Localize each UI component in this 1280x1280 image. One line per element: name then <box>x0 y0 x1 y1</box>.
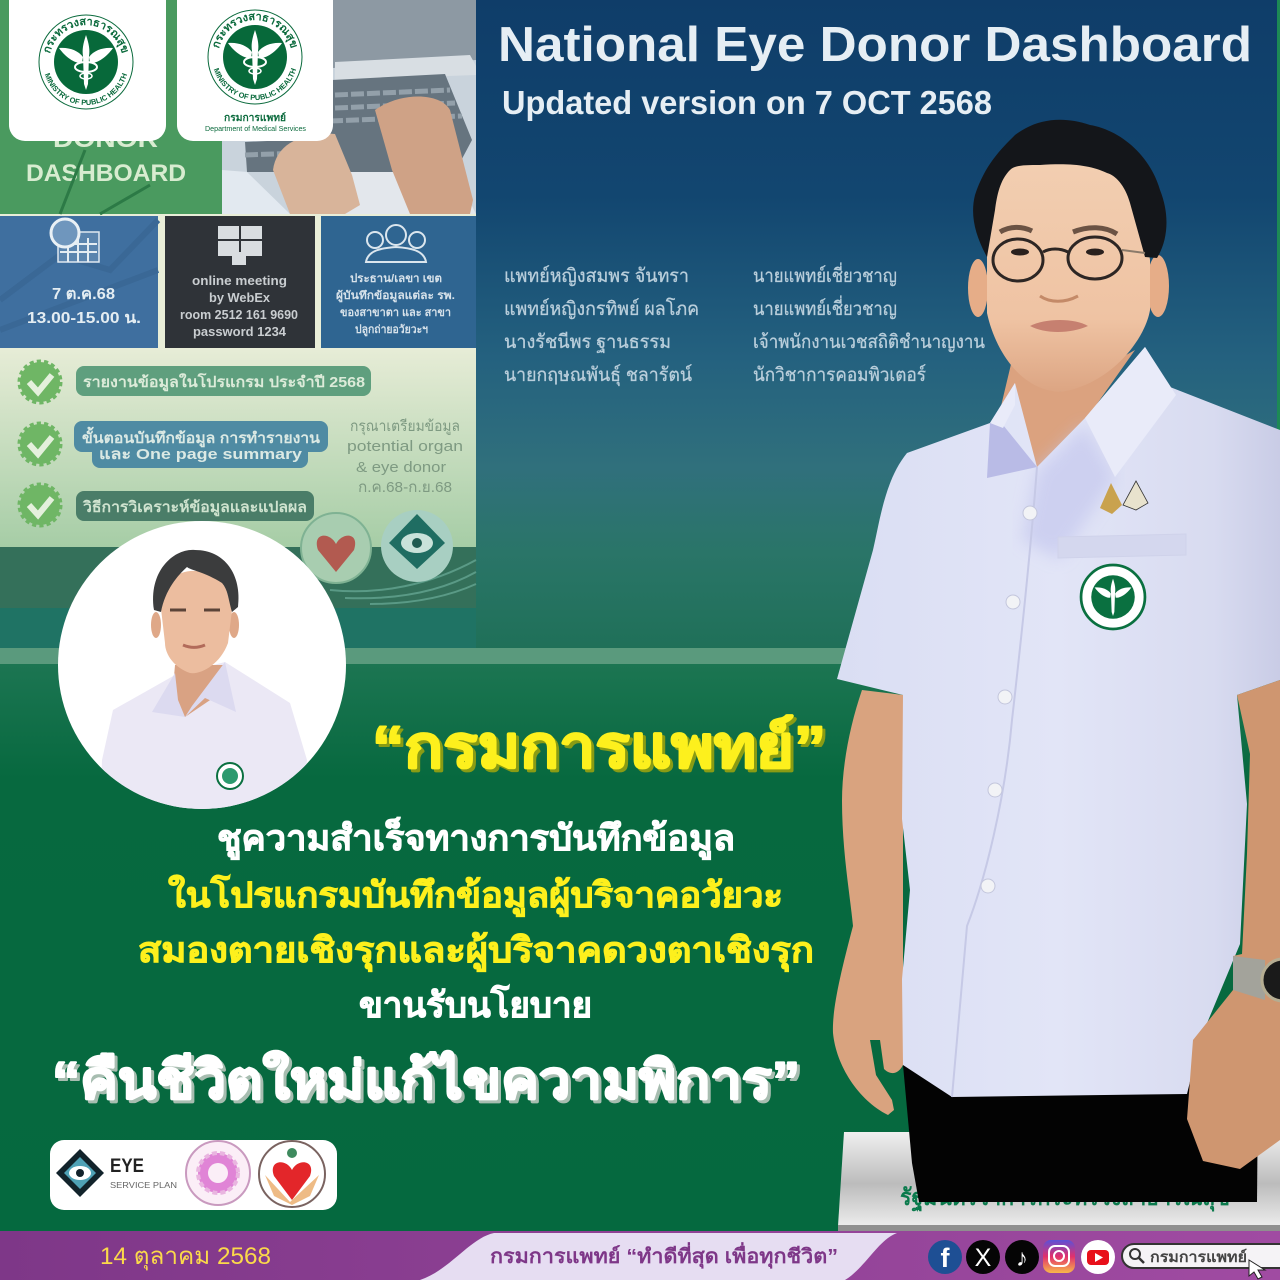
poster header green panel: DONOR <box>53 126 158 153</box>
headline body: ขานรับนโยบาย <box>359 984 592 1025</box>
poster footer band <box>0 547 476 608</box>
poster info: date: 13.00-15.00 น. <box>27 310 141 327</box>
poster info: participants: ประธาน/เลขา เขต <box>350 272 442 285</box>
icon: youtube <box>1081 1240 1115 1274</box>
participant names: นักวิชาการคอมพิวเตอร์ <box>753 364 926 386</box>
face <box>987 149 1150 392</box>
poster info: participants: ปลูกถ่ายอวัยวะฯ <box>355 323 428 337</box>
portrait: main official <box>833 120 1280 1202</box>
headline body: สมองตายเชิงรุกและผู้บริจาคดวงตาเชิงรุก <box>138 931 814 972</box>
logo card: Department of Medical Services: Department of Medical Services <box>205 126 306 133</box>
poster pill 1 <box>76 366 371 396</box>
icon: tiktok: ♪ <box>1016 1245 1028 1272</box>
left arm and hand <box>833 690 903 1115</box>
icon: X: X <box>975 1244 992 1272</box>
icon: facebook <box>928 1240 962 1274</box>
participant names <box>504 262 985 387</box>
shirt body <box>837 347 1280 1097</box>
poster badges <box>301 510 453 583</box>
neck <box>997 350 1135 470</box>
poster info: participants: ผู้บันทึกข้อมูลแต่ละ รพ. <box>336 289 455 303</box>
search box <box>1122 1244 1280 1279</box>
mouth <box>1030 320 1088 332</box>
heading: department: “กรมการแพทย์” <box>375 717 829 783</box>
participant names: นายกฤษณพันธุ์ ชลารัตน์ <box>504 364 692 387</box>
headline body: ชูความสำเร็จทางการบันทึกข้อมูล <box>217 816 735 860</box>
poster pill 2: ขั้นตอนบันทึกข้อมูล การทำรายงาน <box>82 426 321 448</box>
pocket <box>1058 534 1186 558</box>
logo: organ donation <box>259 1141 325 1207</box>
poster info: online meeting: online meeting <box>192 273 287 288</box>
footer date: 14 ตุลาคม 2568 <box>100 1243 271 1271</box>
buttons <box>981 506 1037 893</box>
footer bar <box>0 1231 1280 1280</box>
nose <box>1040 296 1078 301</box>
faded poster <box>0 0 476 608</box>
poster info: participants: ของสาขาตา และ สาขา <box>340 307 451 319</box>
hair <box>973 120 1166 258</box>
heading: department: “กรมการแพทย์” <box>372 714 826 780</box>
participant names: แพทย์หญิงกรทิพย์ ผลโภค <box>504 297 699 320</box>
poster pill 3: วิธีการวิเคราะห์ข้อมูลและแปลผล <box>82 498 307 517</box>
poster note: กรุณาเตรียมข้อมูล <box>350 418 460 436</box>
logo card: Ministry of Public Health: MINISTRY OF PUBLIC HEALTH <box>44 72 127 105</box>
headline body <box>138 816 814 1025</box>
placket <box>952 467 1037 1097</box>
participant names: นางรัชนีพร ฐานธรรม <box>504 331 671 353</box>
icon: tiktok <box>1005 1240 1039 1274</box>
logo: eye service plan: SERVICE PLAN <box>110 1180 177 1190</box>
title: National Eye Donor Dashboard <box>498 18 1252 72</box>
logo card: Department of Medical Services: กระทรวงสาธารณสุข <box>214 13 297 48</box>
poster note: & eye donor <box>356 459 446 476</box>
logo card: Department of Medical Services: กรมการแพทย์ <box>224 112 286 124</box>
shirt emblem <box>1081 565 1145 629</box>
circular portrait: deputy official <box>58 521 346 815</box>
policy slogan: “คืนชีวิตใหม่แก้ไขความพิการ” <box>52 1050 800 1110</box>
poster info: online meeting: password 1234 <box>193 324 287 339</box>
poster pill 3 <box>76 491 314 521</box>
logo card: Department of Medical Services <box>177 0 333 141</box>
poster header green panel: DASHBOARD <box>26 160 186 187</box>
subtitle: Updated version on 7 OCT 2568 <box>502 84 992 121</box>
podium <box>838 1132 1280 1231</box>
participant names: แพทย์หญิงสมพร จันทรา <box>504 265 689 287</box>
poster header green panel <box>0 0 222 214</box>
poster note: ก.ค.68-ก.ย.68 <box>358 479 452 496</box>
logo: hospital <box>186 1141 250 1205</box>
podium: รัฐมนตรีว่าการกระทรวงสาธารณสุข <box>900 1184 1230 1212</box>
icon: X <box>966 1240 1000 1274</box>
poster pill 2 <box>74 421 328 468</box>
shirt shading <box>1022 425 1115 560</box>
partner logos <box>50 1140 337 1210</box>
poster info: participants <box>321 216 476 348</box>
right arm and hand <box>1187 680 1280 1169</box>
logo card: Ministry of Public Health: กระทรวงสาธารณสุข <box>44 18 128 54</box>
poster pill 1: รายงานข้อมูลในโปรแกรม ประจำปี 2568 <box>83 372 365 392</box>
poster check badges <box>20 362 60 525</box>
watch <box>1233 956 1280 1001</box>
poster lower gradient <box>0 350 476 547</box>
policy slogan: “คืนชีวิตใหม่แก้ไขความพิการ” <box>55 1053 803 1113</box>
poster info: online meeting <box>165 216 315 348</box>
eyebrows <box>1000 227 1117 234</box>
icon: instagram <box>1043 1240 1075 1273</box>
icon: facebook: f <box>940 1243 950 1273</box>
poster note: potential organ <box>347 438 463 455</box>
participant names: เจ้าพนักงานเวชสถิติชำนาญงาน <box>753 332 985 353</box>
logo card: Ministry of Public Health <box>9 0 166 141</box>
participant names: นายแพทย์เชี่ยวชาญ <box>753 262 897 287</box>
ears <box>968 255 1169 317</box>
glasses <box>993 237 1145 281</box>
poster info: date <box>0 216 158 348</box>
footer slogan panel: กรมการแพทย์ “ทำดีที่สุด เพื่อทุกชีวิต” <box>490 1241 838 1269</box>
poster pill 2: และ One page summary <box>99 446 303 463</box>
poster laptop photo <box>222 0 476 214</box>
eyes <box>1011 248 1104 256</box>
footer slogan panel <box>420 1233 897 1280</box>
poster info: online meeting: by WebEx <box>209 290 271 305</box>
headline body: ในโปรแกรมบันทึกข้อมูลผู้บริจาคอวัยวะ <box>168 874 783 917</box>
logo: eye service plan: EYE <box>110 1156 144 1177</box>
logo: eye service plan <box>56 1149 177 1197</box>
logo card: Department of Medical Services: MINISTRY OF PUBLIC HEALTH <box>214 68 296 100</box>
poster info: date: 7 ต.ค.68 <box>52 286 115 303</box>
poster info: online meeting: room 2512 161 9690 <box>180 307 298 322</box>
collar <box>987 347 1176 478</box>
search box: กรมการแพทย์ <box>1150 1248 1247 1266</box>
pins <box>1100 481 1148 514</box>
participant names: นายแพทย์เชี่ยวชาญ <box>753 295 897 320</box>
poster note <box>347 418 463 496</box>
trousers <box>903 1065 1258 1202</box>
